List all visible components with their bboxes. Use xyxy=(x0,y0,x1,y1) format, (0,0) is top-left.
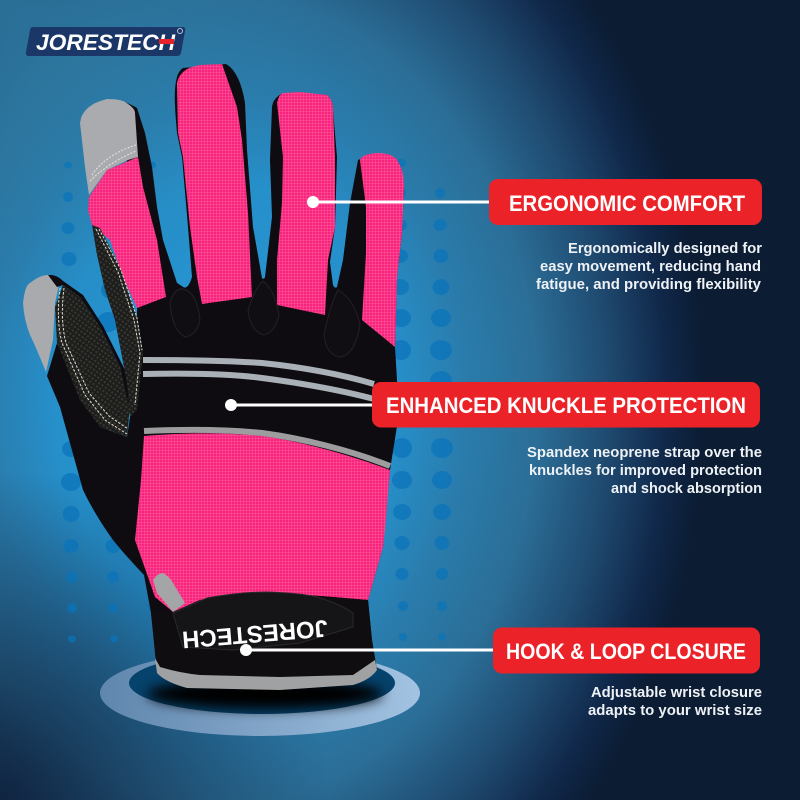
pink fabric: lower hand panel xyxy=(135,433,390,612)
description xyxy=(536,240,762,293)
wrist strap xyxy=(151,592,376,678)
pointer line and dot xyxy=(307,196,490,208)
finger: grey fingertip xyxy=(80,99,138,195)
grey pull tab xyxy=(153,573,185,612)
description: knuckles for improved protection xyxy=(529,462,762,479)
leather strip along first finger xyxy=(92,225,143,417)
grey piping xyxy=(144,430,390,466)
callout: hook and loop xyxy=(240,628,762,719)
description: and shock absorption xyxy=(611,480,762,497)
heading: ERGONOMIC COMFORT xyxy=(509,191,746,216)
description: Adjustable wrist closure xyxy=(591,684,762,701)
description: Spandex neoprene strap over the xyxy=(527,444,762,461)
thumb black outer edge xyxy=(48,275,131,410)
pedestal ellipse xyxy=(100,650,420,736)
pointer line and dot xyxy=(225,399,373,411)
webbing between fingers xyxy=(170,281,360,357)
description: Ergonomically designed for xyxy=(568,240,762,257)
description: adapts to your wrist size xyxy=(588,702,762,719)
glove xyxy=(23,64,404,690)
heading: ENHANCED KNUCKLE PROTECTION xyxy=(386,393,746,418)
heading: HOOK & LOOP CLOSURE xyxy=(506,639,746,664)
pink fabric: first finger xyxy=(88,157,166,308)
leather stitching xyxy=(58,229,142,434)
description xyxy=(588,684,762,719)
description: fatigue, and providing flexibility xyxy=(536,276,762,293)
reflective knuckle bands xyxy=(143,360,374,399)
thumb leather patch xyxy=(55,285,130,437)
logo: JORESTECH xyxy=(36,30,176,55)
callout: ergonomic comfort xyxy=(307,179,762,293)
description: easy movement, reducing hand xyxy=(540,258,761,275)
glove black silhouette xyxy=(47,64,404,690)
callout: knuckle protection xyxy=(225,382,762,497)
thumb grey tip xyxy=(23,275,60,372)
label box xyxy=(493,628,760,674)
velcro patch xyxy=(173,592,353,650)
halftone dot pattern xyxy=(61,159,453,642)
pink fabric: third finger xyxy=(277,92,335,315)
strap logo text: JORESTECH xyxy=(181,614,329,653)
finger: black side of first finger xyxy=(125,102,190,320)
pink fabric: fourth finger xyxy=(360,153,404,347)
pointer line and dot xyxy=(240,644,494,656)
stitching on fingertip xyxy=(90,145,136,181)
pink fabric: second finger xyxy=(177,64,252,304)
description xyxy=(527,444,762,497)
label box xyxy=(372,382,760,428)
label box xyxy=(489,179,762,225)
grey cuff hem xyxy=(155,658,377,690)
